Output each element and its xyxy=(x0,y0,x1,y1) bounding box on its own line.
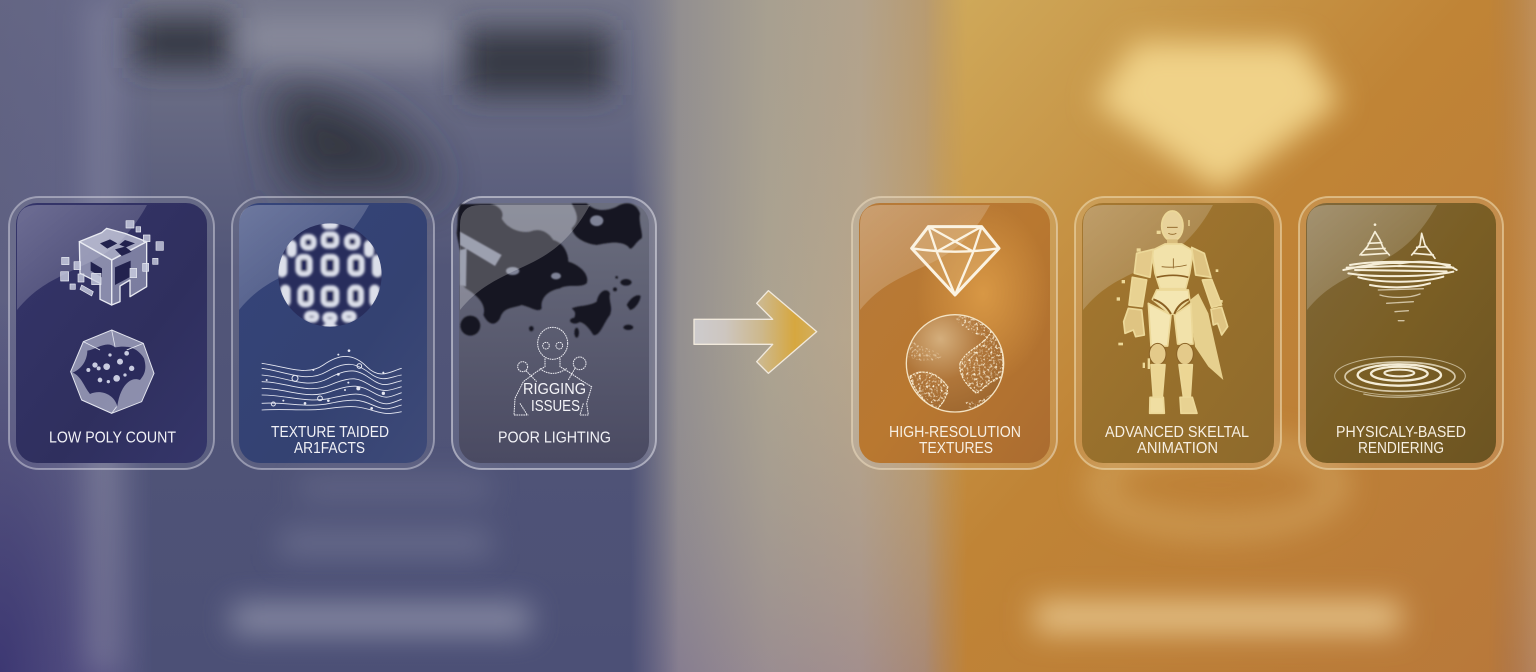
card: low poly count xyxy=(9,197,214,469)
icon: water ripple xyxy=(1335,357,1465,397)
label: poor lighting: POOR LIGHTING xyxy=(498,430,611,446)
icon: wavy texture lines xyxy=(262,349,402,414)
label line 1: PHYSICALY-BASED xyxy=(1336,424,1466,441)
label line 2: TEXTURES xyxy=(919,440,993,457)
cape xyxy=(1190,293,1223,380)
label: rigging issues line 2: ISSUES xyxy=(531,398,580,415)
label line 1: HIGH-RESOLUTION xyxy=(889,424,1021,441)
icon: dotted rig figure xyxy=(514,327,592,415)
icon: broken polyhedron xyxy=(71,330,154,413)
card: physically based rendering xyxy=(1299,197,1503,469)
icon: fragmenting cube xyxy=(61,221,163,305)
card: texture artifacts xyxy=(232,197,434,469)
card: poor lighting and rigging issues xyxy=(452,197,656,469)
highlights in blotches xyxy=(460,215,603,287)
card: high-resolution textures xyxy=(852,197,1057,469)
label line 1: TEXTURE TAIDED xyxy=(271,424,389,441)
arrow xyxy=(694,291,817,373)
icon: diamond xyxy=(912,227,999,295)
icon: water splash reflections xyxy=(1343,223,1457,321)
label line 2: AR1FACTS xyxy=(294,440,365,457)
label line 2: RENDIERING xyxy=(1358,440,1444,457)
icon: robot figure xyxy=(1117,211,1228,413)
label: rigging issues line 1: RIGGING xyxy=(523,381,586,398)
label line 1: ADVANCED SKELTAL xyxy=(1105,424,1249,441)
card: advanced skeletal animation xyxy=(1075,197,1281,469)
label line 2: ANIMATION xyxy=(1137,440,1218,457)
label: LOW POLY COUNT xyxy=(49,430,176,446)
icon: globe xyxy=(906,315,1006,413)
icon: dark ink blotches xyxy=(457,203,642,338)
icon: checker sphere xyxy=(278,221,382,331)
